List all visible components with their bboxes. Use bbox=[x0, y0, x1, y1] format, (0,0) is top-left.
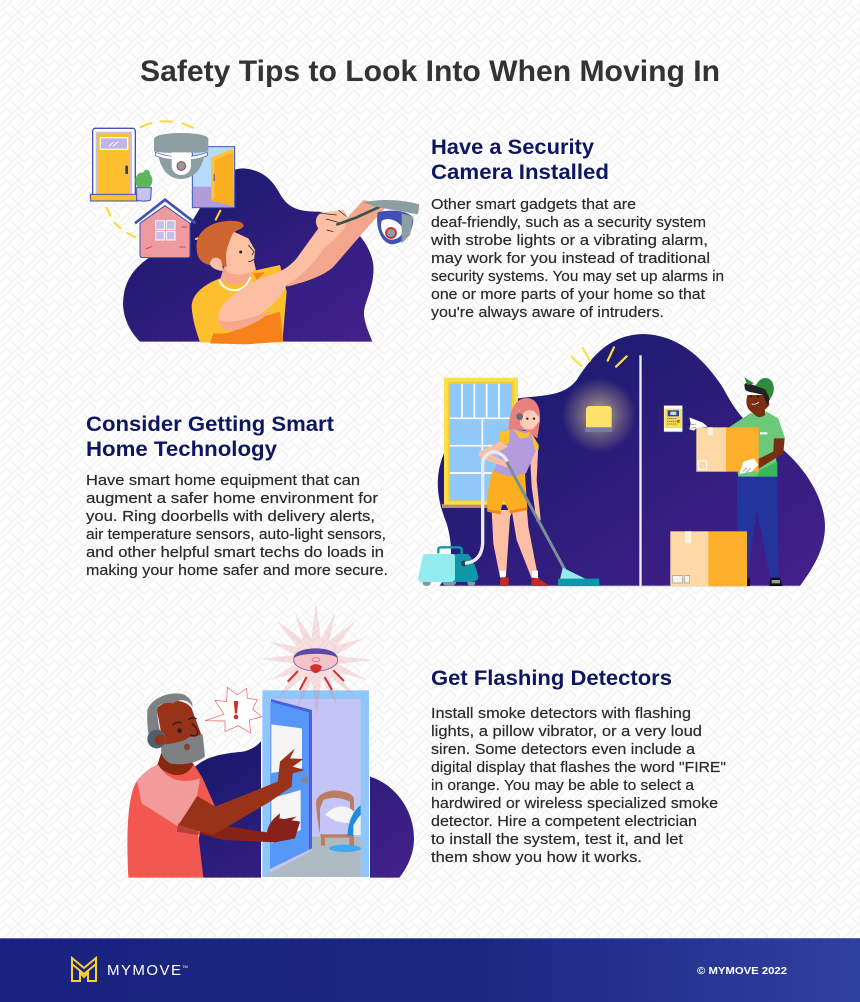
body: siren. Some detectors even include a bbox=[431, 742, 696, 758]
gloves bbox=[739, 458, 758, 474]
heading: Get Flashing Detectors bbox=[431, 666, 672, 690]
illustration: flashing smoke detector bbox=[127, 602, 414, 878]
body: detector. Hire a competent electrician bbox=[431, 814, 697, 830]
shorts bbox=[487, 470, 527, 514]
body: deaf-friendly, such as a security system bbox=[431, 215, 706, 231]
heading: Camera Installed bbox=[431, 160, 609, 184]
head bbox=[752, 410, 765, 417]
body: in orange. You may be able to select a bbox=[431, 778, 695, 794]
body: digital display that flashes the word "FIRE" bbox=[431, 760, 726, 776]
body bbox=[430, 197, 724, 321]
body: lights, a pillow vibrator, or a very loud bbox=[431, 724, 702, 740]
blob background bbox=[438, 334, 825, 586]
hearing aid bbox=[147, 730, 166, 748]
heading: Have a Security bbox=[431, 135, 594, 159]
body: you're always aware of intruders. bbox=[431, 305, 664, 321]
footer band bbox=[0, 938, 860, 1002]
heading bbox=[86, 412, 334, 461]
body bbox=[431, 706, 726, 866]
cardboard box bbox=[670, 531, 747, 586]
heading: Home Technology bbox=[86, 437, 277, 461]
icon: front door bbox=[90, 128, 138, 201]
delivery man figure bbox=[689, 377, 785, 586]
copyright: © MYMOVE 2022 bbox=[697, 965, 787, 977]
icon: alert rays bbox=[571, 347, 627, 367]
trousers bbox=[737, 477, 778, 578]
head bbox=[157, 701, 203, 755]
torso bbox=[494, 428, 538, 477]
icon: smoke detector bbox=[288, 648, 344, 690]
icon: house bbox=[135, 200, 196, 258]
blob background bbox=[193, 738, 414, 878]
man figure bbox=[192, 200, 388, 344]
body: them show you how it works. bbox=[431, 850, 642, 866]
beard bbox=[161, 734, 205, 764]
legs bbox=[492, 510, 513, 577]
box carried bbox=[696, 427, 726, 472]
ear bbox=[210, 258, 223, 271]
body bbox=[86, 473, 388, 579]
shirt bbox=[192, 265, 287, 342]
icon: logo mark bbox=[72, 958, 96, 981]
icon: potted plant bbox=[135, 170, 152, 201]
hair back bbox=[509, 398, 540, 438]
icon: alert speech burst bbox=[205, 687, 262, 733]
face bbox=[222, 230, 256, 275]
logo wordmark: MYMOVE bbox=[107, 962, 181, 979]
back arm bbox=[287, 200, 388, 287]
body: security systems. You may set up alarms in bbox=[431, 269, 724, 285]
text block: smart home technology bbox=[86, 412, 388, 579]
elderly man figure bbox=[127, 693, 305, 878]
heading bbox=[431, 135, 609, 184]
body: and other helpful smart techs do loads in bbox=[86, 545, 384, 561]
back arm bbox=[198, 818, 300, 842]
body: one or more parts of your home so that bbox=[431, 287, 705, 303]
body: Have smart home equipment that can bbox=[86, 473, 360, 489]
illustration: man installing security camera bbox=[90, 121, 419, 344]
arm bbox=[753, 438, 785, 470]
front hand bbox=[267, 813, 300, 842]
body: Install smoke detectors with flashing bbox=[431, 706, 691, 722]
icon: wall keypad bbox=[664, 405, 683, 432]
front arm bbox=[479, 442, 510, 467]
dashed motion ring bbox=[107, 121, 220, 239]
body: hardwired or wireless specialized smoke bbox=[431, 796, 718, 812]
shirt bbox=[730, 412, 785, 477]
hair bbox=[197, 221, 244, 267]
wall divider bbox=[639, 355, 642, 586]
body: augment a safer home environment for bbox=[86, 491, 378, 507]
neck bbox=[220, 267, 253, 285]
woman figure bbox=[479, 398, 548, 586]
front arm bbox=[178, 748, 305, 835]
back arm bbox=[529, 443, 541, 522]
blob background bbox=[123, 168, 373, 342]
door frame bbox=[261, 690, 370, 878]
text block: flashing detectors bbox=[431, 666, 726, 866]
neck bbox=[157, 752, 193, 775]
bedroom chair and rug bbox=[316, 790, 361, 852]
screwdriver bbox=[337, 204, 385, 224]
floor line bbox=[439, 586, 800, 587]
shirt bbox=[127, 763, 215, 878]
icon: open door bbox=[192, 147, 235, 208]
text block: security camera bbox=[430, 135, 724, 321]
body: to install the system, test it, and let bbox=[431, 832, 683, 848]
body: may work for you instead of traditional bbox=[431, 251, 710, 267]
title: Safety Tips to Look Into When Moving In bbox=[140, 55, 720, 88]
icon: dome camera bbox=[154, 133, 208, 179]
body: with strobe lights or a vibrating alarm, bbox=[430, 233, 708, 249]
illustration: smart home scene bbox=[418, 334, 825, 587]
icon: installed camera bbox=[363, 200, 419, 244]
flash starburst bbox=[260, 602, 373, 717]
icon: strobe light bbox=[562, 378, 636, 452]
heading: Consider Getting Smart bbox=[86, 412, 334, 436]
open door bbox=[270, 699, 312, 869]
body: air temperature sensors, auto-light sensors, bbox=[86, 527, 386, 543]
body: Other smart gadgets that are bbox=[431, 197, 636, 213]
icon: window bbox=[442, 378, 518, 508]
icon: vacuum cleaner bbox=[418, 452, 599, 586]
body: you. Ring doorbells with delivery alerts, bbox=[86, 509, 375, 525]
body: making your home safer and more secure. bbox=[86, 563, 388, 579]
front arm bbox=[218, 210, 346, 329]
trademark: TM bbox=[182, 964, 188, 969]
face bbox=[518, 408, 539, 429]
sleeve bbox=[137, 765, 200, 827]
